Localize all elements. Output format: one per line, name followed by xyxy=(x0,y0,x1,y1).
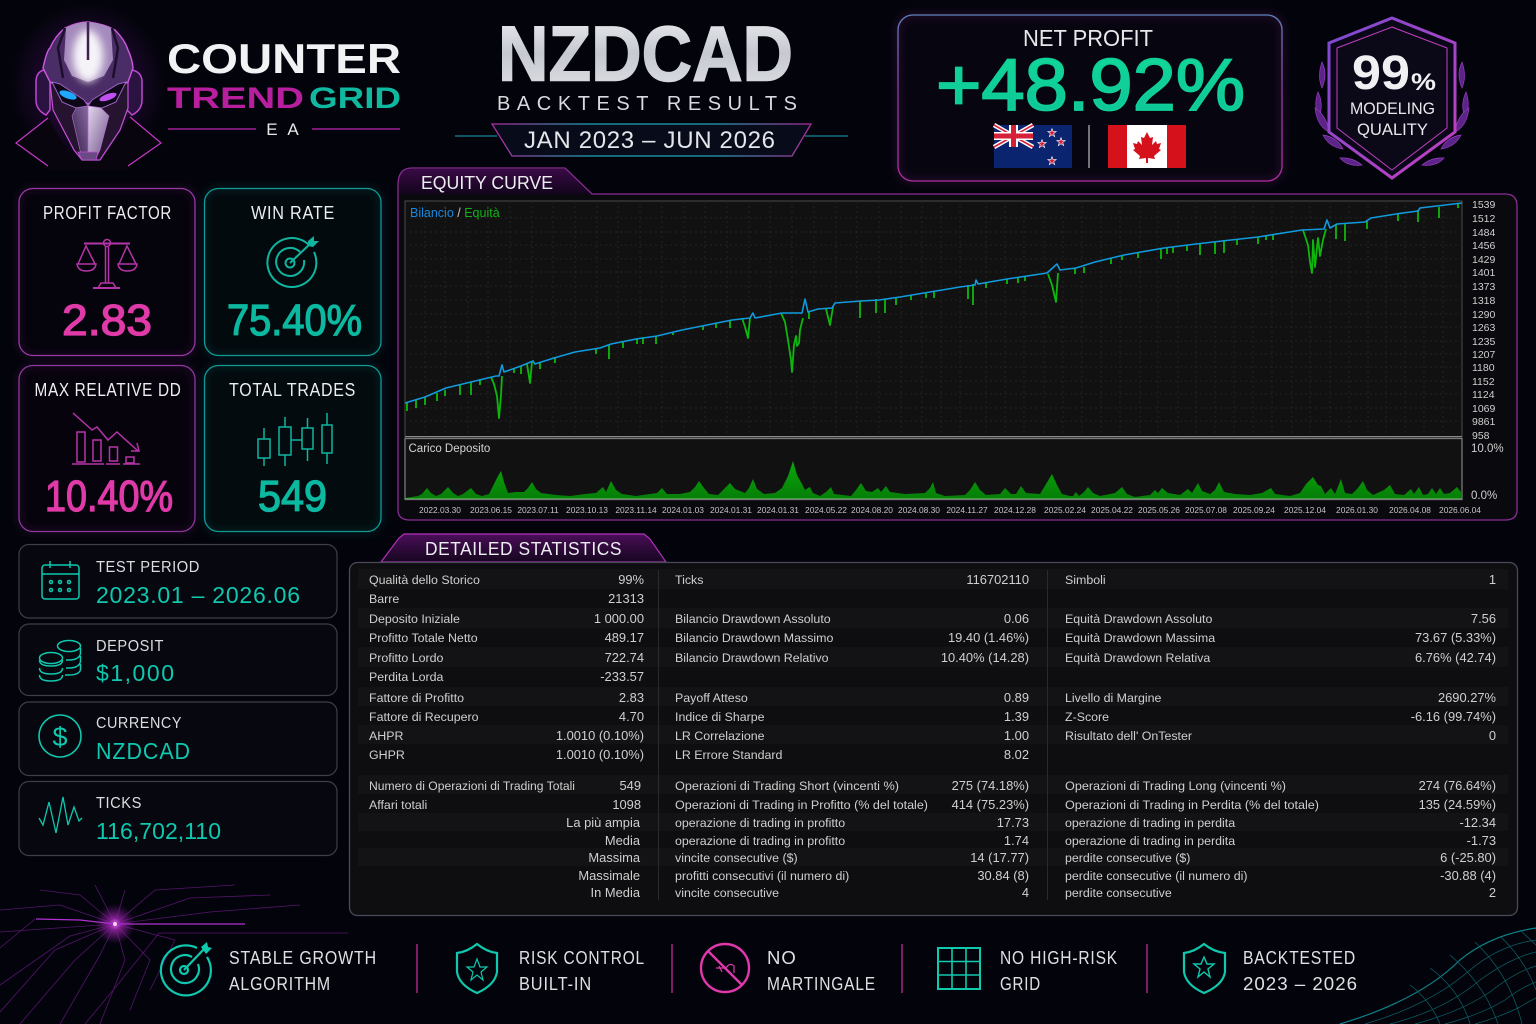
statistics column 2: Bilancio Drawdown Assoluto xyxy=(675,612,831,626)
badge: modeling quality: MODELING xyxy=(1350,99,1435,118)
divider xyxy=(671,944,673,993)
title: NZDCAD xyxy=(498,10,793,98)
panel: net profit xyxy=(898,15,1282,181)
x axis dates: 2024.01.31 xyxy=(710,505,752,515)
statistics column 1: 2.83 xyxy=(619,690,644,705)
icon: Canada flag xyxy=(1108,125,1186,168)
statistics column 1: 722.74 xyxy=(605,650,644,665)
x axis dates: 2024.08.30 xyxy=(898,505,940,515)
date range banner xyxy=(455,124,848,156)
statistics column 2: Ticks xyxy=(675,573,703,587)
chart: deposit load: Carico Deposito xyxy=(408,443,490,455)
panel: profit factor: 2.83 xyxy=(62,296,152,345)
statistics column 1: 489.17 xyxy=(605,630,644,645)
statistics column 1: La più ampia xyxy=(566,815,641,830)
statistics column 3: perdite consecutive xyxy=(1065,886,1172,900)
statistics column 3 xyxy=(1065,572,1496,900)
heading tab: detailed statistics: DETAILED STATISTICS xyxy=(425,538,622,559)
icon: scales xyxy=(77,240,137,288)
feature: no martingale xyxy=(701,944,876,994)
panel: currency xyxy=(19,702,337,776)
logo wordmark: E A xyxy=(266,120,302,139)
feature: backtested: BACKTESTED xyxy=(1243,947,1356,968)
statistics column 1: 4.70 xyxy=(619,709,644,724)
panel: total trades: TOTAL TRADES xyxy=(229,380,356,400)
panel: ticks: 116,702,110 xyxy=(96,818,222,844)
statistics column 1: 1.0010 (0.10%) xyxy=(556,728,644,743)
x axis dates: 2025.12.04 xyxy=(1284,505,1326,515)
y axis labels: 1180 xyxy=(1472,362,1495,374)
equity line xyxy=(407,204,1458,418)
statistics column 3: Livello di Margine xyxy=(1065,691,1162,705)
statistics column 1: -233.57 xyxy=(600,669,644,684)
statistics column 1: 99% xyxy=(618,572,644,587)
statistics column 3: 274 (76.64%) xyxy=(1419,778,1496,793)
chart: balance and equity xyxy=(405,201,1462,437)
y axis labels: 1124 xyxy=(1472,389,1495,401)
statistics column 2 xyxy=(675,572,1029,900)
legend: Bilancio / Equità xyxy=(410,206,500,220)
panel: win rate: WIN RATE xyxy=(251,203,335,223)
statistics column 1 xyxy=(369,572,644,900)
y axis labels: 1235 xyxy=(1472,336,1496,348)
icon: falling bars xyxy=(72,413,140,464)
y axis labels: 1401 xyxy=(1472,267,1496,279)
logo wordmark: COUNTER xyxy=(167,35,401,82)
x axis dates: 2024.01.31 xyxy=(757,505,799,515)
statistics column 2: 10.40% (14.28) xyxy=(941,650,1029,665)
statistics column 2: Bilancio Drawdown Relativo xyxy=(675,651,829,665)
icon: coins xyxy=(40,640,80,681)
statistics column 3: perdite consecutive ($) xyxy=(1065,851,1190,865)
heading tab: detailed statistics xyxy=(381,534,666,562)
badge: modeling quality: % xyxy=(1411,69,1436,96)
icon: calendar xyxy=(42,561,79,599)
feature: backtested xyxy=(1184,944,1358,994)
x axis dates: 2024.05.22 xyxy=(805,505,847,515)
statistics column 2: 14 (17.77) xyxy=(970,850,1029,865)
statistics column 1: Fattore di Recupero xyxy=(369,710,479,724)
statistics column 1: GHPR xyxy=(369,748,405,762)
statistics column 1: 1.0010 (0.10%) xyxy=(556,747,644,762)
x axis dates: 2023.11.14 xyxy=(615,505,657,515)
statistics column 3: Equità Drawdown Massima xyxy=(1065,631,1215,645)
y axis labels: 1539 xyxy=(1472,199,1496,211)
statistics column 1: AHPR xyxy=(369,729,403,743)
statistics column 2: 0.06 xyxy=(1004,611,1029,626)
statistics column 3: Z-Score xyxy=(1065,710,1109,724)
statistics column 3: -12.34 xyxy=(1459,815,1496,830)
y axis labels: 1456 xyxy=(1472,240,1496,252)
x axis dates: 2024.12.28 xyxy=(994,505,1036,515)
statistics column 2: 275 (74.18%) xyxy=(952,778,1029,793)
statistics column 1: 21313 xyxy=(608,591,644,606)
y axis labels: 1318 xyxy=(1472,295,1496,307)
statistics column 2: 116702110 xyxy=(966,572,1029,587)
feature: no martingale: NO xyxy=(767,947,797,968)
divider xyxy=(416,944,418,993)
chart: deposit load xyxy=(405,436,1504,502)
statistics column 3: -30.88 (4) xyxy=(1440,868,1496,883)
x axis dates xyxy=(419,505,1481,515)
x axis dates: 2024.01.03 xyxy=(662,505,704,515)
statistics column 2: LR Errore Standard xyxy=(675,748,783,762)
y axis labels: 1069 xyxy=(1472,403,1496,415)
x axis dates: 2023.10.13 xyxy=(566,505,608,515)
panel: net profit: +48.92% xyxy=(936,45,1245,126)
statistics column 3: 6.76% (42.74) xyxy=(1415,650,1496,665)
icon: pulse xyxy=(39,797,82,833)
feature: backtested: 2023 – 2026 xyxy=(1243,973,1358,994)
statistics column 3: -6.16 (99.74%) xyxy=(1411,709,1496,724)
statistics column 1: Perdita Lorda xyxy=(369,670,444,684)
y axis labels: 1429 xyxy=(1472,254,1496,266)
statistics column 3: Simboli xyxy=(1065,573,1106,587)
statistics column 3: 2 xyxy=(1489,885,1496,900)
x axis dates: 2025.07.08 xyxy=(1185,505,1227,515)
y axis labels: 1373 xyxy=(1472,281,1496,293)
statistics column 3: 1 xyxy=(1489,572,1496,587)
statistics column 2: 4 xyxy=(1022,885,1029,900)
statistics column 2: Payoff Atteso xyxy=(675,691,748,705)
statistics column 1: Profitto Lordo xyxy=(369,651,443,665)
statistics column 1: Massimale xyxy=(578,868,640,883)
statistics column 2: Operazioni di Trading in Profitto (% del totale) xyxy=(675,798,928,812)
feature: no high-risk grid: GRID xyxy=(1000,973,1041,994)
panel: max relative drawdown: 10.40% xyxy=(45,472,173,521)
panel: win rate xyxy=(204,188,381,356)
badge: modeling quality: 99 xyxy=(1352,47,1410,100)
statistics column 2: 19.40 (1.46%) xyxy=(948,630,1029,645)
x axis dates: 2026.06.04 xyxy=(1439,505,1481,515)
icon: dollar coin: $ xyxy=(52,722,68,752)
statistics column 3: 6 (-25.80) xyxy=(1440,850,1496,865)
statistics column 1: Massima xyxy=(588,850,641,865)
panel: deposit: $1,000 xyxy=(96,660,175,686)
x axis dates: 2024.08.20 xyxy=(851,505,893,515)
feature: risk control: RISK CONTROL xyxy=(519,947,645,968)
logo wordmark xyxy=(167,35,401,139)
statistics column 1: 1 000.00 xyxy=(594,611,644,626)
feature: risk control: BUILT-IN xyxy=(519,973,592,994)
panel: currency: NZDCAD xyxy=(96,738,191,764)
statistics column 2: vincite consecutive ($) xyxy=(675,851,798,865)
panel: max relative drawdown xyxy=(19,366,195,532)
statistics column 1: Fattore di Profitto xyxy=(369,691,464,705)
panel: currency: CURRENCY xyxy=(96,715,182,732)
statistics column 2: Bilancio Drawdown Massimo xyxy=(675,631,833,645)
statistics column 1: Affari totali xyxy=(369,798,427,812)
statistics column 3: 73.67 (5.33%) xyxy=(1415,630,1496,645)
divider xyxy=(1146,944,1148,993)
statistics column 2: vincite consecutive xyxy=(675,886,779,900)
statistics column 3: 7.56 xyxy=(1471,611,1496,626)
statistics column 1: Barre xyxy=(369,592,399,606)
statistics column 2: 17.73 xyxy=(997,815,1029,830)
statistics column 2: 1.00 xyxy=(1004,728,1029,743)
logo wordmark: GRID xyxy=(309,82,401,115)
statistics column 3: Operazioni di Trading Long (vincenti %) xyxy=(1065,779,1286,793)
statistics column 1: Qualità dello Storico xyxy=(369,573,480,587)
y axis labels: 1484 xyxy=(1472,227,1496,239)
panel: deposit: DEPOSIT xyxy=(96,638,164,655)
statistics column 2: 1.74 xyxy=(1004,833,1029,848)
decoration: wireframe mesh xyxy=(1340,928,1536,1024)
statistics column 3: -1.73 xyxy=(1467,833,1496,848)
statistics column 1: Deposito Iniziale xyxy=(369,612,460,626)
chart: deposit load: 0.0% xyxy=(1471,490,1497,502)
panel: deposit xyxy=(19,624,337,696)
statistics column 3: operazione di trading in perdita xyxy=(1065,816,1235,830)
statistics column 1: In Media xyxy=(591,885,641,900)
chart: deposit load: 10.0% xyxy=(1471,443,1504,455)
feature: no high-risk grid: NO HIGH-RISK xyxy=(1000,947,1118,968)
x axis dates: 2022.03.30 xyxy=(419,505,461,515)
statistics column 2: 414 (75.23%) xyxy=(952,797,1029,812)
statistics column 2: operazione di trading in profitto xyxy=(675,834,845,848)
statistics column 3: Equità Drawdown Assoluto xyxy=(1065,612,1213,626)
y axis labels: 1207 xyxy=(1472,349,1496,361)
y axis labels: 958 xyxy=(1472,430,1490,442)
statistics column 2: Indice di Sharpe xyxy=(675,710,765,724)
panel: equity curve xyxy=(398,168,1517,520)
x axis dates: 2025.05.26 xyxy=(1138,505,1180,515)
panel: detailed statistics xyxy=(350,562,1518,916)
x axis dates: 2025.09.24 xyxy=(1233,505,1275,515)
statistics column 2: Operazioni di Trading Short (vincenti %) xyxy=(675,779,899,793)
y axis labels: 1152 xyxy=(1472,376,1495,388)
statistics column 3: operazione di trading in perdita xyxy=(1065,834,1235,848)
icon: target xyxy=(267,236,319,287)
divider xyxy=(901,944,903,993)
y axis labels: 1263 xyxy=(1472,322,1496,334)
panel: max relative drawdown: MAX RELATIVE DD xyxy=(34,380,182,400)
heading: equity curve: EQUITY CURVE xyxy=(421,172,553,193)
statistics column 2: 30.84 (8) xyxy=(977,868,1029,883)
x axis dates: 2023.07.11 xyxy=(517,505,559,515)
x axis dates: 2025.04.22 xyxy=(1091,505,1133,515)
statistics column 3: Risultato dell' OnTester xyxy=(1065,729,1192,743)
statistics column 2: operazione di trading in profitto xyxy=(675,816,845,830)
feature: stable growth: STABLE GROWTH xyxy=(229,947,377,968)
statistics column 3: 2690.27% xyxy=(1438,690,1496,705)
feature: stable growth: ALGORITHM xyxy=(229,973,331,994)
y axis labels: 1290 xyxy=(1472,309,1496,321)
panel: net profit: NET PROFIT xyxy=(1023,25,1153,51)
decoration: circuit network xyxy=(0,885,348,1024)
date range banner: JAN 2023 – JUN 2026 xyxy=(524,127,775,154)
statistics column 1: Numero di Operazioni di Trading Totali xyxy=(369,779,575,793)
balance line xyxy=(405,203,1462,403)
feature: no high-risk grid xyxy=(938,947,1118,994)
y axis labels xyxy=(1472,199,1496,442)
panel: profit factor: PROFIT FACTOR xyxy=(43,203,172,223)
x axis dates: 2026.01.30 xyxy=(1336,505,1378,515)
panel: ticks: TICKS xyxy=(96,795,142,812)
panel: test period: TEST PERIOD xyxy=(96,559,200,576)
statistics column 1: 549 xyxy=(619,778,641,793)
feature: no martingale: MARTINGALE xyxy=(767,973,876,994)
icon: New Zealand flag xyxy=(994,125,1072,168)
statistics column 3: Operazioni di Trading in Perdita (% del totale) xyxy=(1065,798,1319,812)
feature: risk control xyxy=(457,944,645,994)
badge: modeling quality xyxy=(1315,18,1469,178)
badge: modeling quality: QUALITY xyxy=(1357,120,1428,139)
feature: stable growth xyxy=(161,942,377,995)
panel: profit factor xyxy=(19,188,195,356)
panel: test period: 2023.01 – 2026.06 xyxy=(96,582,301,608)
statistics column 1: 1098 xyxy=(612,797,641,812)
statistics column 3: perdite consecutive (il numero di) xyxy=(1065,869,1248,883)
y axis labels: 9861 xyxy=(1472,416,1496,428)
title: BACKTEST RESULTS xyxy=(497,93,797,115)
y axis labels: 1512 xyxy=(1472,213,1496,225)
panel: win rate: 75.40% xyxy=(227,296,362,345)
icon: candlesticks xyxy=(258,413,332,466)
statistics column 2: LR Correlazione xyxy=(675,729,765,743)
statistics column 3: Equità Drawdown Relativa xyxy=(1065,651,1210,665)
panel: ticks xyxy=(19,782,337,856)
statistics column 2: profitti consecutivi (il numero di) xyxy=(675,869,849,883)
statistics column 3: 0 xyxy=(1489,728,1496,743)
statistics column 1: Media xyxy=(605,833,641,848)
x axis dates: 2024.11.27 xyxy=(946,505,988,515)
statistics column 1: Profitto Totale Netto xyxy=(369,631,478,645)
panel: test period xyxy=(19,544,337,618)
statistics column 2: 1.39 xyxy=(1004,709,1029,724)
statistics column 2: 0.89 xyxy=(1004,690,1029,705)
x axis dates: 2023.06.15 xyxy=(470,505,512,515)
statistics column 3: 135 (24.59%) xyxy=(1419,797,1496,812)
x axis dates: 2025.02.24 xyxy=(1044,505,1086,515)
panel: total trades: 549 xyxy=(258,472,327,521)
icon: dollar coin xyxy=(39,715,81,757)
logo wordmark: TREND xyxy=(167,82,304,115)
x axis dates: 2026.04.08 xyxy=(1389,505,1431,515)
panel: total trades xyxy=(204,366,381,532)
logo: helmet mascot xyxy=(10,3,166,170)
statistics column 2: 8.02 xyxy=(1004,747,1029,762)
